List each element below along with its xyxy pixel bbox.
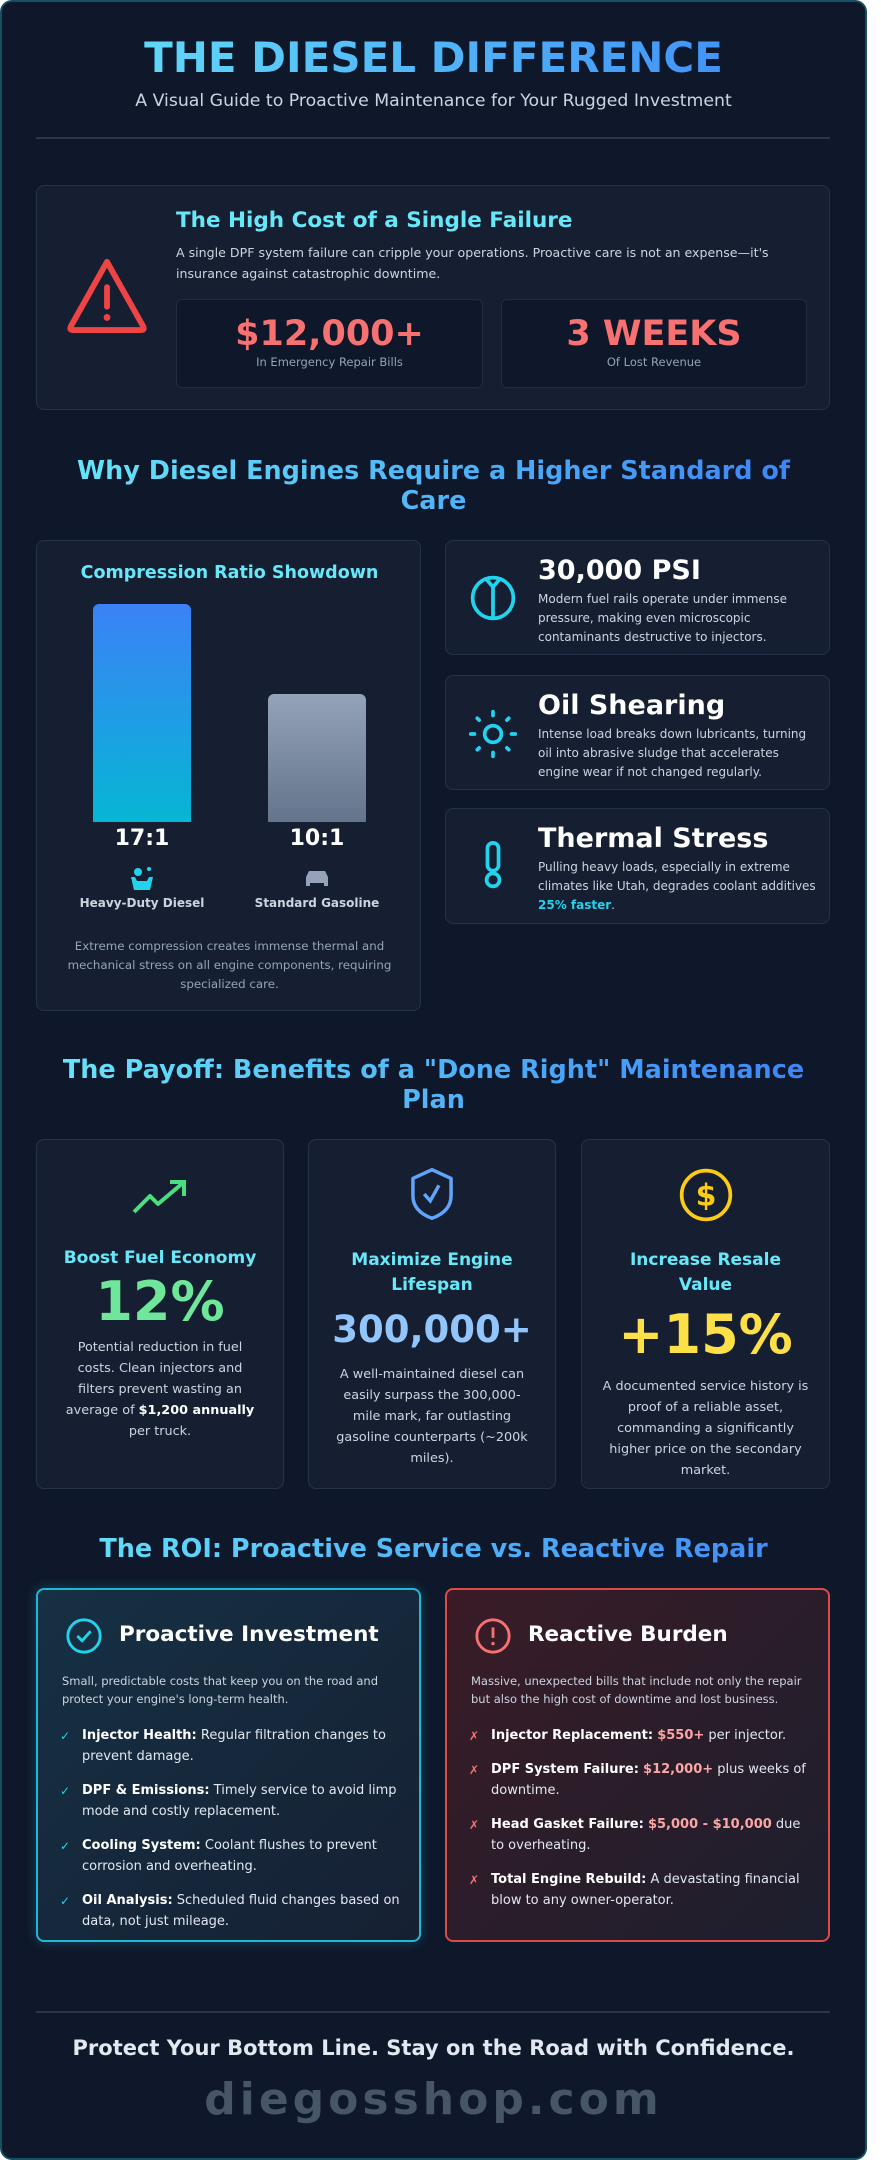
checklist	[60, 1728, 400, 1929]
cost list: ✗	[469, 1729, 479, 1743]
heading: payoff: The Payoff: Benefits of a "Done Right" Maintenance Plan	[63, 1055, 804, 1115]
card: thermal stress: Pulling heavy loads, especially in extreme climates like Utah, degrades coolant additives 25% faster.	[538, 860, 816, 912]
cost list: ✗	[469, 1763, 479, 1777]
checklist: DPF & Emissions: Timely service to avoid limp mode and costly replacement.	[82, 1783, 397, 1819]
stat: repair bills: $12,000+	[235, 314, 424, 354]
cost list: ✗	[469, 1818, 479, 1832]
checklist: ✓	[60, 1784, 70, 1798]
label gasoline: Standard Gasoline	[255, 896, 379, 910]
footer brand: diegosshop.com	[204, 2074, 663, 2125]
card: fuel economy: Potential reduction in fuel costs. Clean injectors and filters prevent wasting an average of $1,200 annually per truck.	[66, 1340, 254, 1439]
label 17:1: 17:1	[115, 826, 169, 851]
text: A single DPF system failure can cripple your operations. Proactive care is not an expense—it's insurance against catastrophic downtime.	[176, 245, 769, 281]
card: resale value: +15%	[618, 1303, 793, 1366]
checklist: ✓	[60, 1839, 70, 1853]
card: engine lifespan: Maximize Engine Lifespan	[351, 1250, 513, 1295]
stat: lost revenue	[501, 299, 807, 388]
intro: Massive, unexpected bills that include not only the repair but also the high cost of downtime and lost business.	[471, 1674, 802, 1706]
subtitle: A Visual Guide to Proactive Maintenance for Your Rugged Investment	[135, 91, 732, 111]
card: resale value	[581, 1139, 830, 1489]
cost list: DPF System Failure: $12,000+ plus weeks of downtime.	[491, 1762, 806, 1798]
bar: gasoline	[268, 694, 366, 822]
cost list: Head Gasket Failure: $5,000 - $10,000 due to overheating.	[491, 1817, 800, 1853]
footer tagline: Protect Your Bottom Line. Stay on the Road with Confidence.	[73, 2036, 794, 2060]
card: 30,000 PSI: Modern fuel rails operate under immense pressure, making even microscopic contaminants destructive to injectors.	[538, 592, 787, 644]
icon: gauge	[470, 576, 516, 620]
card: engine lifespan: 300,000+	[332, 1308, 532, 1351]
bar: diesel	[93, 604, 191, 822]
card: engine lifespan: A well-maintained diesel can easily surpass the 300,000-mile mark, far outlasting gasoline counterparts (~200k miles).	[336, 1367, 528, 1466]
card: oil shearing: Intense load breaks down lubricants, turning oil into abrasive sludge that accelerates engine wear if not changed regularly.	[538, 727, 806, 779]
label 10:1: 10:1	[290, 826, 344, 851]
icon: dollar: $	[695, 1178, 716, 1213]
card: thermal stress: Thermal Stress	[538, 823, 768, 854]
icon: thermometer	[484, 841, 502, 888]
card: resale value: A documented service history is proof of a reliable asset, commanding a significantly higher price on the secondary market.	[603, 1379, 808, 1478]
stat: repair bills: In Emergency Repair Bills	[256, 355, 403, 369]
card: oil shearing	[445, 675, 830, 790]
cost list: ✗	[469, 1873, 479, 1887]
title: THE DIESEL DIFFERENCE	[144, 33, 723, 82]
cost list: Injector Replacement: $550+ per injector.	[491, 1728, 786, 1743]
chart title: Compression Ratio Showdown	[81, 563, 378, 583]
panel: reactive	[445, 1588, 830, 1942]
stat: repair bills	[176, 299, 483, 388]
title	[0, 33, 867, 83]
stat: lost revenue: 3 WEEKS	[566, 314, 742, 354]
icon: check circle	[66, 1618, 102, 1654]
card: oil shearing: Oil Shearing	[538, 690, 725, 721]
card: fuel economy	[36, 1139, 284, 1489]
icon: shield	[411, 1168, 453, 1220]
card: 30,000 PSI: 30,000 PSI	[538, 555, 701, 586]
caption: Extreme compression creates immense thermal and mechanical stress on all engine components, requiring specialized care.	[68, 939, 391, 991]
checklist: ✓	[60, 1729, 70, 1743]
panel: high cost alert	[36, 185, 830, 410]
heading: The High Cost of a Single Failure	[176, 208, 572, 233]
panel: proactive	[36, 1588, 421, 1942]
checklist: ✓	[60, 1894, 70, 1908]
icon: trend	[132, 1180, 186, 1214]
card: fuel economy: Boost Fuel Economy	[64, 1248, 256, 1268]
cost list: Total Engine Rebuild: A devastating financial blow to any owner-operator.	[491, 1872, 800, 1908]
heading: Reactive Burden	[528, 1622, 728, 1647]
card: 30,000 PSI	[445, 540, 830, 655]
label diesel: Heavy-Duty Diesel	[80, 896, 204, 910]
icon: alert circle	[475, 1618, 511, 1654]
stat: lost revenue: Of Lost Revenue	[607, 355, 701, 369]
checklist: Cooling System: Coolant flushes to prevent corrosion and overheating.	[82, 1838, 377, 1874]
card: engine lifespan	[308, 1139, 556, 1489]
card: resale value: Increase Resale Value	[630, 1250, 781, 1295]
heading: ROI: The ROI: Proactive Service vs. Reactive Repair	[99, 1534, 768, 1564]
icon: dollar	[680, 1168, 732, 1222]
icon: car	[306, 871, 328, 886]
icon: diesel	[131, 867, 153, 890]
icon: warning triangle	[67, 258, 147, 333]
heading: Proactive Investment	[119, 1622, 379, 1647]
cost list	[469, 1728, 806, 1908]
heading: why diesel: Why Diesel Engines Require a Higher Standard of Care	[77, 456, 790, 516]
card: thermal stress	[445, 808, 830, 924]
icon: sun	[468, 710, 518, 758]
checklist: Oil Analysis: Scheduled fluid changes based on data, not just mileage.	[82, 1893, 400, 1929]
checklist: Injector Health: Regular filtration changes to prevent damage.	[82, 1728, 386, 1764]
card: fuel economy: 12%	[95, 1270, 225, 1333]
panel: compression chart	[36, 540, 421, 1011]
intro: Small, predictable costs that keep you on the road and protect your engine's long-term health.	[62, 1674, 378, 1706]
